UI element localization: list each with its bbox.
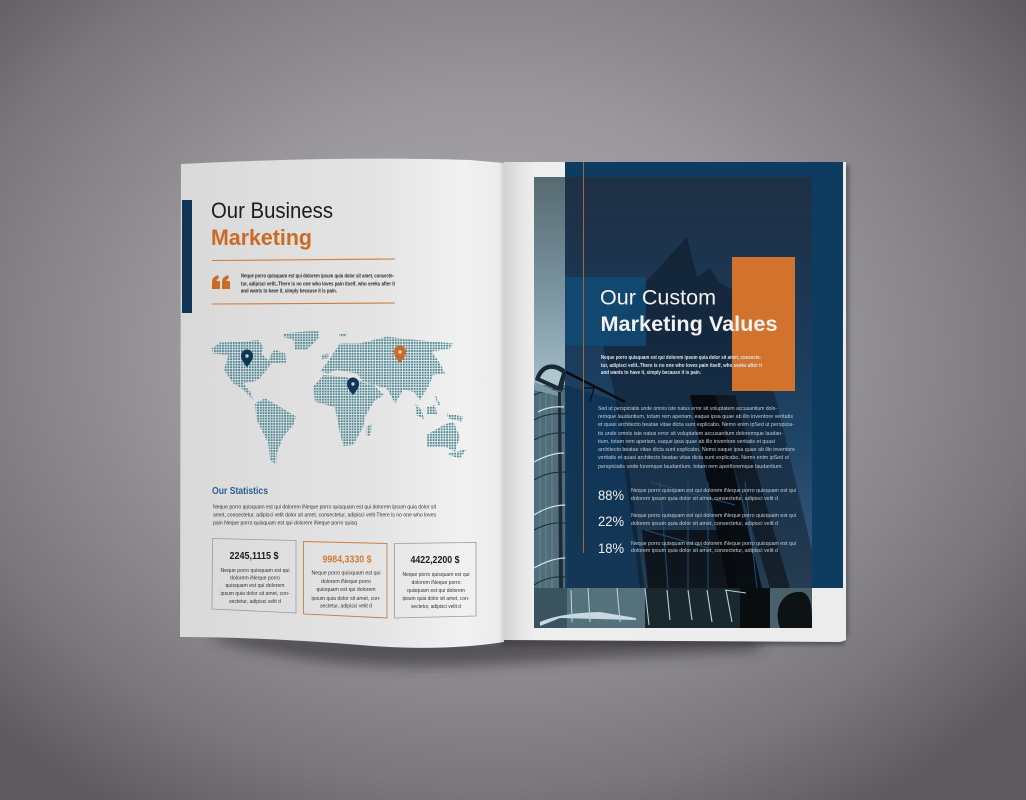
map pin: North America	[241, 350, 253, 367]
stat: 88%: dolorem ipsum quia dolor sit amet, consectetur, adipisci velit d	[631, 496, 778, 502]
intro text: tur, adipisci velit..There is no one who loves pain itself, who seeks after it	[601, 363, 762, 369]
body text: et quasi architecto beatae vitae dicta sunt explicabo. Nemo enim ipSed ut perspicia-	[598, 422, 794, 428]
dark tower through overlay	[566, 237, 812, 588]
stat card 3: ipsum quia dolor sit amet, con-	[402, 596, 470, 602]
blue panel	[565, 162, 843, 588]
stat: 18%: dolorem ipsum quia dolor sit amet, consectetur, adipisci velit d	[631, 548, 778, 554]
stat card 1: quisquam est qui dolorem	[226, 583, 285, 589]
body text: veritatis et quasi architecto beatae vitae dicta sunt explicabo. Nemo enim ipSed ut	[598, 455, 789, 461]
body text: architecto beatae vitae dicta sunt explicabo. Nemo eaque ipsa quae ab illo inventore	[598, 447, 796, 453]
statistics paragraph: amet, consectetur, adipisci velit dolor sit amet, consectetur, adipisci velit There is no one who loves	[213, 512, 436, 518]
map pin: Africa	[347, 378, 359, 395]
stat: 22%: 22%	[598, 513, 624, 529]
stat: 18%: 18%	[598, 540, 624, 556]
body text	[598, 406, 796, 470]
heading: Our Business Marketing: Marketing	[211, 225, 312, 250]
heading: Our Custom Marketing Values	[600, 286, 778, 336]
stat: 88%: 88%	[598, 487, 624, 503]
glass roof	[535, 364, 567, 392]
heading: Our Statistics: Our Statistics	[212, 486, 268, 497]
stat card 1: ipsum quia dolor sit amet, con-	[220, 591, 290, 597]
orange block	[732, 257, 795, 391]
stat card 3: Neque porro quisquam est qui	[402, 572, 470, 578]
lighter blue block	[565, 277, 646, 346]
map pin: Asia	[394, 346, 406, 363]
intro text	[601, 355, 762, 376]
body text: perspiciatis unde loremque laudantium, totam rem aperiloremque laudantium.	[598, 464, 783, 470]
body text: remque laudantium, totam rem aperiam, eaque ipsa quae ab illo inventore veritatis	[598, 414, 793, 420]
stat card 3: 4422,2200 $	[410, 555, 460, 566]
quote text: and wants to have it, simply because it is pain.	[241, 288, 337, 294]
heading: Our Business Marketing: Our Business	[211, 198, 333, 223]
stat card 3: sectetur, adipisci velit d	[411, 604, 461, 610]
blue overlay on photo	[565, 177, 812, 588]
heading: Our Custom Marketing Values: Our Custom	[600, 286, 716, 310]
stat: 22%: dolorem ipsum quia dolor sit amet, consectetur, adipisci velit d	[631, 521, 778, 527]
heading: Our Custom Marketing Values: Marketing Values	[600, 312, 778, 336]
stat card 2: dolorem iNeque porro	[321, 579, 371, 585]
body text: Sed ut perspiciatis unde omnis iste natus error sit voluptatem accusantium dolo-	[598, 406, 777, 412]
heading: Our Business Marketing	[211, 198, 333, 250]
icon: quote mark	[212, 275, 230, 289]
quote text: tur, adipisci velit..There is no one who loves pain itself, who seeks after it	[241, 282, 395, 288]
statistics paragraph: pain Neque porro quisquam est qui dolorem iNeque porro quisq	[213, 520, 357, 526]
building base	[534, 588, 567, 628]
stat card 1	[212, 538, 296, 613]
stat card 3: dolorem iNeque porro	[412, 580, 460, 586]
brochure shadow	[215, 165, 849, 667]
intro text: and wants to have it, simply because it is pain.	[601, 370, 701, 376]
stat card 2: Neque porro quisquam est qui	[312, 570, 380, 576]
accent bar	[182, 200, 192, 313]
world map	[212, 331, 467, 465]
statistics paragraph	[213, 504, 436, 526]
rule top	[212, 259, 395, 260]
foreground building	[566, 385, 644, 588]
panel: left page	[180, 159, 504, 648]
rule bottom	[212, 303, 395, 304]
stat: 88%	[598, 487, 796, 503]
stat card 2	[304, 542, 387, 618]
stat: 18%	[598, 540, 796, 556]
stat card 2: 9984,3330 $	[322, 554, 372, 566]
stat card 3: quisquam est qui dolorem	[407, 588, 465, 594]
stat card 3	[394, 542, 476, 618]
stat card 1: dolorem iNeque porro	[230, 576, 280, 582]
quote text: Neque porro quisquam est qui dolorem ipsum quia dolor sit amet, consecte-	[241, 274, 394, 280]
stat card 1: Neque porro quisquam est qui	[220, 568, 290, 574]
stat card 2: quisquam est qui dolorem	[316, 587, 376, 593]
stat: 22%: Neque porro quisquam est qui dolorem iNeque porro quisquam est qui	[631, 513, 796, 519]
stat: 88%: Neque porro quisquam est qui dolorem iNeque porro quisquam est qui	[631, 488, 796, 494]
panel: right page	[504, 162, 846, 642]
stat: 18%: Neque porro quisquam est qui dolorem iNeque porro quisquam est qui	[631, 541, 796, 547]
body text: tis unde omnis iste natus error sit voluptatem accusantium doloremque laudan-	[598, 431, 783, 437]
stat card 1: 2245,1115 $	[230, 551, 279, 562]
stat card 1: sectetur, adipisci velit d	[229, 599, 281, 605]
intro text: Neque porro quisquam est qui dolorem ipsum quia dolor sit amet, consecte-	[601, 355, 761, 361]
vertical orange rule	[583, 162, 584, 553]
statistics paragraph: Neque porro quisquam est qui dolorem iNeque porro quisquam est qui dolorem ipsum quia dolor sit	[213, 504, 436, 510]
quote text	[241, 274, 395, 294]
stat card 2: ipsum quia dolor sit amet, con-	[312, 596, 381, 602]
photo: office tower	[534, 177, 812, 628]
body text: tium, totam rem aperiam, eaque ipsa quae ab illo inventore veritatis et quasi	[598, 439, 775, 445]
stat: 22%	[598, 513, 796, 529]
stat card 2: sectetur, adipisci velit d	[320, 604, 372, 610]
